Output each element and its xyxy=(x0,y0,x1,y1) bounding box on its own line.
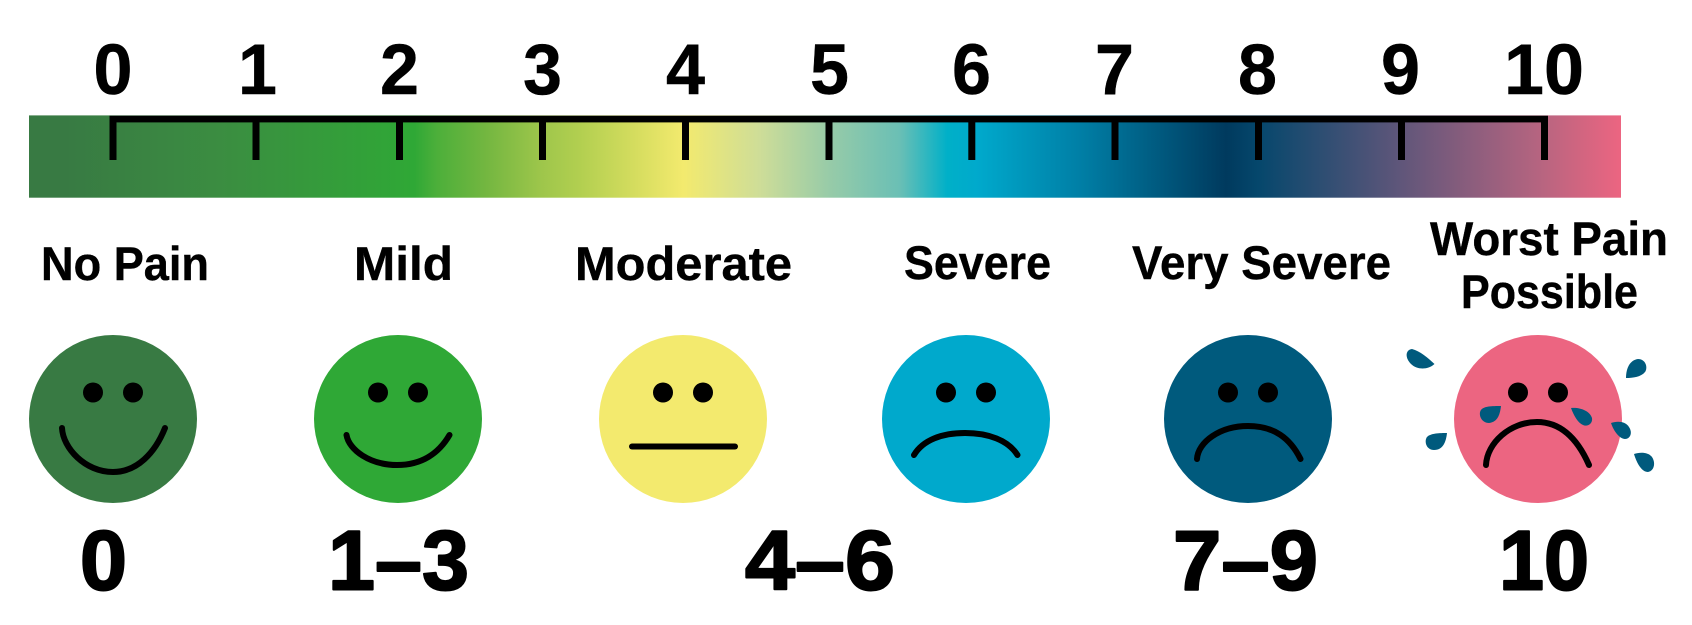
label: Worst Pain Possible: Worst Pain xyxy=(1430,212,1668,265)
scale numbers 0 to 10: 3 xyxy=(523,31,562,110)
range: 4 to 6: 4–6 xyxy=(745,514,895,608)
scale numbers 0 to 10: 2 xyxy=(380,31,419,110)
range: 0: 0 xyxy=(80,514,127,608)
label: Moderate: Moderate xyxy=(575,237,792,290)
label: Worst Pain Possible xyxy=(1430,212,1668,318)
scale numbers 0 to 10: 0 xyxy=(94,31,132,110)
label: Worst Pain Possible: Possible xyxy=(1461,265,1638,318)
scale numbers 0 to 10: 5 xyxy=(810,31,849,110)
label: Very Severe: Very Severe xyxy=(1132,236,1391,289)
face: worst pain with tears xyxy=(1407,335,1654,503)
range: 1 to 3: 1–3 xyxy=(328,514,469,608)
scale numbers 0 to 10: 9 xyxy=(1381,31,1420,110)
icon: tear drops xyxy=(1407,349,1654,472)
scale numbers 0 to 10: 10 xyxy=(1504,31,1584,110)
ruler axis with ticks xyxy=(110,116,1548,160)
range: 7 to 9: 7–9 xyxy=(1173,514,1318,608)
label: Severe: Severe xyxy=(904,236,1051,289)
range: 10: 10 xyxy=(1499,514,1589,608)
scale numbers 0 to 10: 1 xyxy=(238,31,277,110)
scale numbers 0 to 10 xyxy=(94,31,1584,110)
face: moderate xyxy=(599,335,767,503)
face: no pain xyxy=(29,335,197,503)
label: Mild: Mild xyxy=(354,237,453,290)
scale numbers 0 to 10: 4 xyxy=(666,31,705,110)
gradient bar xyxy=(29,115,1621,198)
scale numbers 0 to 10: 8 xyxy=(1238,31,1277,110)
face: severe xyxy=(882,335,1050,503)
face: mild xyxy=(314,335,482,503)
scale numbers 0 to 10: 6 xyxy=(952,31,991,110)
face: very severe xyxy=(1164,335,1332,503)
scale numbers 0 to 10: 7 xyxy=(1095,31,1134,110)
label: No Pain: No Pain xyxy=(41,237,209,290)
